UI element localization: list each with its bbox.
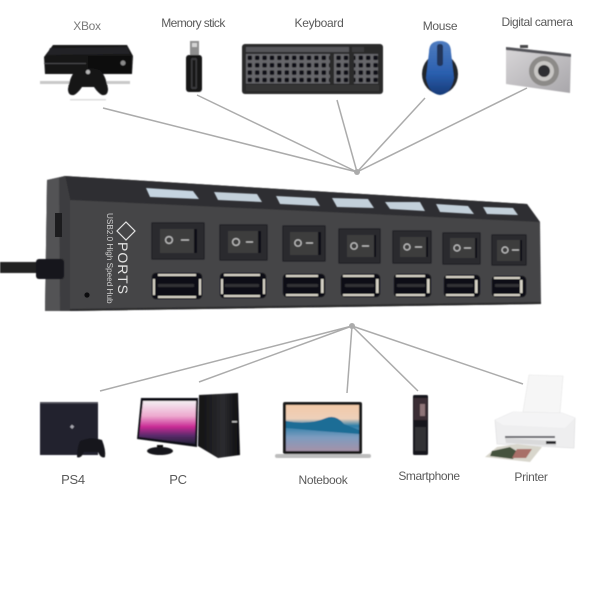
hub logo text: rotated: PORTS [115,242,131,295]
device: mouse [422,41,458,95]
label: Printer: Printer [514,470,548,484]
hub reset hole [84,292,90,298]
device: memory stick [186,41,202,92]
device: PC [137,393,240,458]
label: Mouse: Mouse [423,19,458,33]
connector lines: hub to bottom devices [100,323,523,393]
device: digital camera [506,45,571,93]
label: Smartphone: Smartphone [398,469,460,483]
PS4 controller [77,438,105,457]
hub logo diamond [117,222,135,240]
device: PS4 [40,402,105,457]
LED windows [146,188,518,215]
label: PC: PC [169,472,187,487]
PC tower [198,393,240,458]
connector lines: top devices to hub [103,88,527,175]
xbox controller [68,68,108,95]
hub subtitle text: rotated: USB2.0 High Speed Hub [105,213,114,304]
label: Notebook: Notebook [299,473,349,487]
hub cable [0,262,38,273]
label: PS4: PS4 [61,472,85,487]
device: smartphone [413,395,428,455]
device: printer [485,375,575,462]
label: Digital camera: Digital camera [501,15,573,29]
hub body [45,176,541,311]
label: Keyboard: Keyboard [295,16,343,30]
USB ports [152,273,526,299]
hub cable connector [36,259,64,279]
device: XBox [40,45,133,100]
label: XBox: XBox [73,19,101,33]
printed photo [485,444,542,462]
USB hub [0,176,541,311]
device: notebook [275,402,371,458]
device: keyboard [242,44,383,94]
hub side port [55,213,62,237]
label: Memory stick: Memory stick [161,16,226,30]
rocker switches [152,223,526,265]
